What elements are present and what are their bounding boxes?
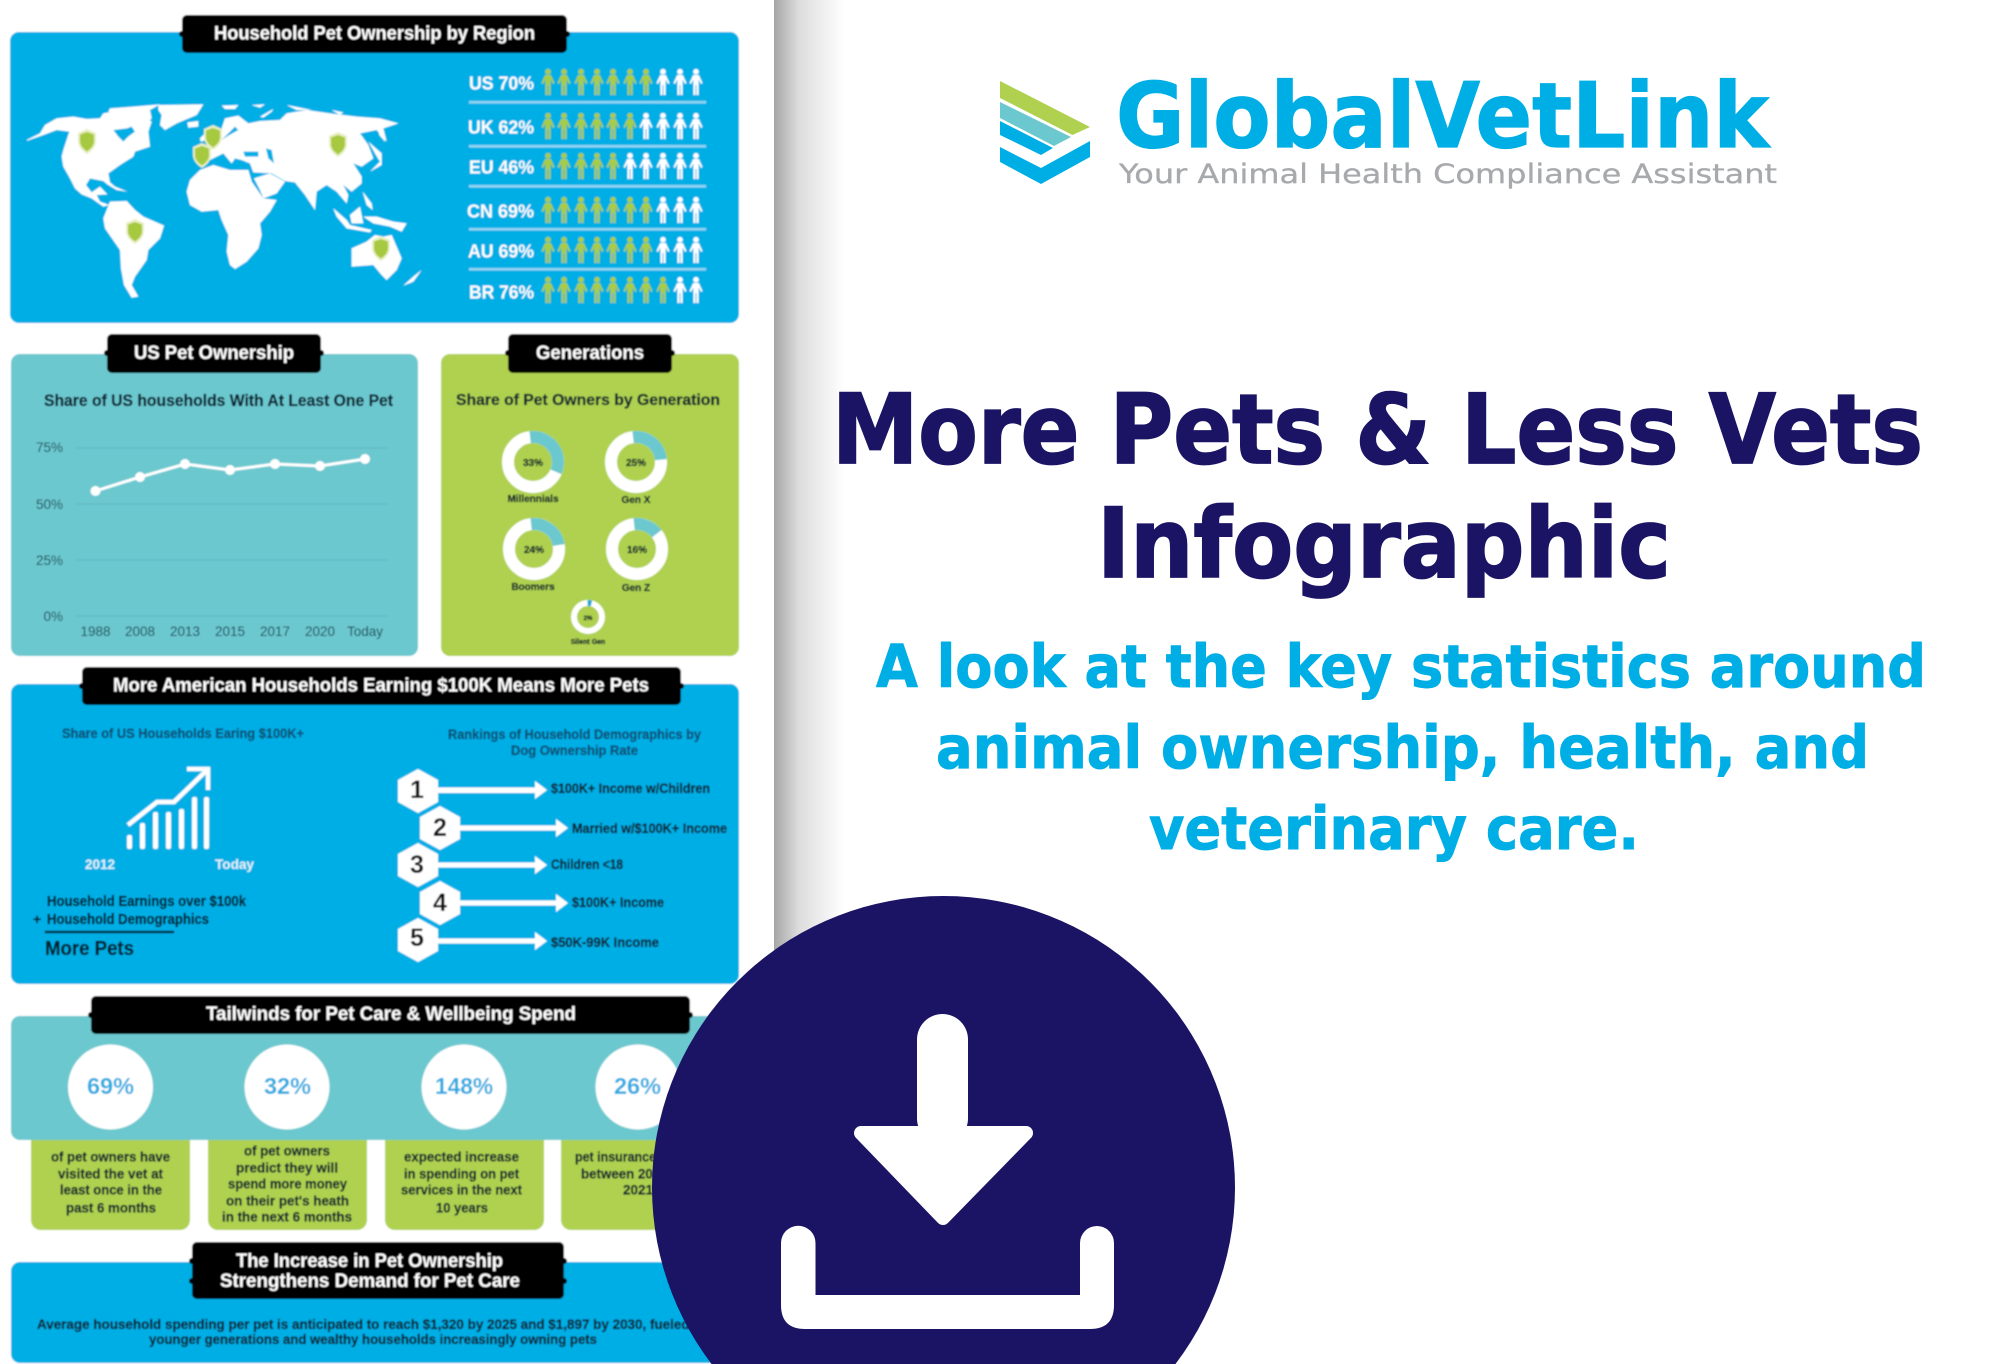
- ranking 4: $100K+ Income: [572, 894, 664, 910]
- row: US 70%: [469, 69, 702, 95]
- body text: Average household spending per pet is anticipated to reach $1,320 by 2025 and $1,897 by 2030, fueled by: [37, 1316, 709, 1332]
- heading: household pet ownership: [179, 15, 570, 53]
- row: UK 62%: UK 62%: [468, 118, 534, 138]
- stat: 148%: services in the next: [401, 1182, 522, 1198]
- heading: increase in pet ownership: The Increase in Pet Ownership: [236, 1251, 503, 1272]
- stat: 26%: between 2020 and: [581, 1166, 695, 1182]
- equation: more pets: [33, 894, 247, 960]
- donut: gen x: 25%: [626, 458, 646, 469]
- row: AU 69%: [468, 237, 702, 263]
- donut: millennials: Millennials: [507, 494, 559, 505]
- donut: silent gen: Silent Gen: [571, 639, 605, 646]
- axis labels: 2012: [85, 856, 115, 872]
- subheading: rankings: Rankings of Household Demographics by: [448, 726, 701, 742]
- heading: US pet ownership: [104, 334, 324, 373]
- axis labels: [85, 856, 254, 872]
- stat: 148%: 10 years: [436, 1200, 488, 1216]
- logo: GlobalVetLink: [1000, 64, 1777, 190]
- chart title: Share of US households With At Least One Pet: [44, 392, 393, 410]
- donut: boomers: Boomers: [511, 582, 555, 593]
- stat: 26%: 26%: [614, 1073, 661, 1099]
- equation: more pets: More Pets: [45, 938, 134, 960]
- title: Infographic: [1097, 488, 1671, 600]
- heading: generations: [505, 334, 675, 373]
- line chart: 2013: [170, 624, 200, 639]
- subheading: rankings: [448, 726, 701, 758]
- subtitle: A look at the key statistics around: [876, 632, 1926, 701]
- heading: more american households: [79, 667, 684, 705]
- stat: 148%: 148%: [435, 1073, 493, 1099]
- stat: 32%: spend more money: [228, 1176, 347, 1192]
- donut: millennials: 33%: [523, 458, 543, 469]
- stat: 69%: past 6 months: [66, 1200, 156, 1216]
- stat: 32%: [222, 1044, 352, 1224]
- ranking 3: [398, 843, 623, 887]
- heading: household pet ownership: Household Pet Ownership by Region: [214, 24, 535, 44]
- stat: 69%: least once in the: [60, 1182, 162, 1198]
- panel: increase in pet ownership: [11, 1242, 739, 1363]
- line chart: 1988: [80, 624, 111, 639]
- line chart: [36, 440, 387, 639]
- ranking 2: 2: [433, 814, 447, 842]
- ranking 2: Married w/$100K+ Income: [572, 820, 727, 836]
- line chart: 50%: [36, 497, 63, 512]
- row: EU 46%: EU 46%: [469, 158, 534, 178]
- body text: [37, 1316, 709, 1347]
- row: CN 69%: [467, 197, 702, 223]
- stat: 32%: of pet owners: [244, 1142, 330, 1158]
- heading: US pet ownership: US Pet Ownership: [134, 343, 294, 364]
- subheading: share of households: Share of US Households Earing $100K+: [62, 725, 304, 741]
- ranking 1: $100K+ Income w/Children: [551, 780, 710, 796]
- chart title: Share of Pet Owners by Generation: [456, 392, 720, 409]
- donut: gen z: Gen Z: [622, 583, 650, 594]
- heading: more american households: More American Households Earning $100K Means More Pets: [113, 676, 649, 696]
- stat: 32%: predict they will: [236, 1160, 338, 1176]
- axis labels: Today: [215, 856, 254, 872]
- donut: millennials: [506, 435, 560, 505]
- stat: 32%: on their pet's heath: [226, 1192, 349, 1208]
- equation: more pets: Household Earnings over $100k: [47, 894, 247, 910]
- donut: silent gen: 2%: [584, 616, 593, 622]
- ranking 4: [420, 881, 664, 925]
- panel: tailwinds for pet care: [11, 996, 739, 1230]
- ranking 5: 5: [410, 924, 424, 952]
- ranking 1: [398, 769, 710, 813]
- subtitle: animal ownership, health, and: [936, 713, 1869, 782]
- heading: increase in pet ownership: [189, 1242, 567, 1299]
- stat: 26%: [575, 1044, 701, 1198]
- subtitle: veterinary care.: [1149, 794, 1639, 863]
- stat: 148%: in spending on pet: [404, 1166, 519, 1182]
- line chart: 25%: [36, 553, 63, 568]
- icon: download arrow: [861, 1014, 1026, 1218]
- stat: 32%: 32%: [264, 1073, 311, 1099]
- panel: household pet ownership by region: [10, 15, 739, 323]
- donut: gen z: 16%: [627, 545, 647, 556]
- donut: gen x: [609, 435, 663, 506]
- line chart: 0%: [43, 609, 63, 624]
- row: BR 76%: BR 76%: [469, 282, 534, 302]
- infographic preview page: [0, 0, 774, 1364]
- download button: [652, 896, 1235, 1364]
- row: EU 46%: [469, 153, 702, 179]
- stat: 32%: in the next 6 months: [222, 1208, 352, 1224]
- line chart: 2008: [125, 624, 155, 639]
- panel: US pet ownership: [11, 334, 418, 656]
- panel: more american households earning 100k: [11, 667, 739, 984]
- ranking 1: 1: [410, 776, 424, 804]
- row: AU 69%: AU 69%: [468, 242, 534, 262]
- line chart: 75%: [36, 440, 63, 455]
- ranking 3: Children <18: [551, 856, 623, 872]
- heading: tailwinds: Tailwinds for Pet Care & Wellbeing Spend: [206, 1004, 576, 1025]
- body text: younger generations and wealthy households increasingly owning pets: [149, 1331, 597, 1347]
- row: US 70%: US 70%: [469, 74, 534, 94]
- donut: boomers: 24%: [524, 545, 544, 556]
- equation: more pets: +: [33, 911, 41, 927]
- stat: 26%: 2021: [623, 1182, 653, 1198]
- line chart: 2015: [215, 624, 245, 639]
- ranking 3: 3: [410, 851, 424, 879]
- stat: 69%: [51, 1044, 170, 1216]
- heading: generations: Generations: [536, 343, 644, 364]
- donut: boomers: [507, 522, 561, 593]
- stat: 69%: visited the vet at: [58, 1166, 163, 1182]
- row: BR 76%: [469, 277, 702, 303]
- icon: growth chart: [127, 769, 209, 849]
- panel: generations: [441, 334, 739, 656]
- row: CN 69%: CN 69%: [467, 202, 534, 222]
- line chart: 2020: [305, 624, 335, 639]
- ranking 5: [398, 918, 659, 962]
- stat boxes: [31, 1125, 720, 1230]
- equation: more pets: Household Demographics: [47, 912, 209, 928]
- heading: tailwinds: [88, 996, 693, 1034]
- page shadow: [774, 0, 844, 1364]
- stat: 148%: [401, 1044, 522, 1216]
- stat: 26%: pet insurance growth: [575, 1148, 701, 1164]
- map markers: [78, 125, 390, 261]
- logo mark: [1000, 81, 1090, 184]
- donut: gen z: [610, 522, 664, 594]
- ranking 4: 4: [433, 889, 447, 917]
- title: [832, 374, 1923, 600]
- donut: silent gen: [571, 603, 605, 646]
- subtitle: [876, 632, 1926, 863]
- subheading: rankings: Dog Ownership Rate: [511, 742, 638, 758]
- stat: 69%: of pet owners have: [51, 1148, 170, 1164]
- donut: gen x: Gen X: [622, 495, 651, 506]
- line chart: 2017: [260, 624, 290, 639]
- ranking 2: [420, 806, 727, 850]
- ranking 5: $50K-99K Income: [551, 934, 659, 950]
- logo tagline: Your Animal Health Compliance Assistant: [1118, 159, 1777, 190]
- row: UK 62%: [468, 113, 702, 139]
- heading: increase in pet ownership: Strengthens Demand for Pet Care: [220, 1271, 520, 1292]
- world map: [27, 104, 422, 298]
- stat: 148%: expected increase: [404, 1148, 519, 1164]
- logo wordmark: GlobalVetLink: [1116, 64, 1771, 169]
- line chart: Today: [347, 624, 383, 639]
- icon: download tray: [781, 1226, 1114, 1329]
- stat: 69%: 69%: [87, 1073, 134, 1099]
